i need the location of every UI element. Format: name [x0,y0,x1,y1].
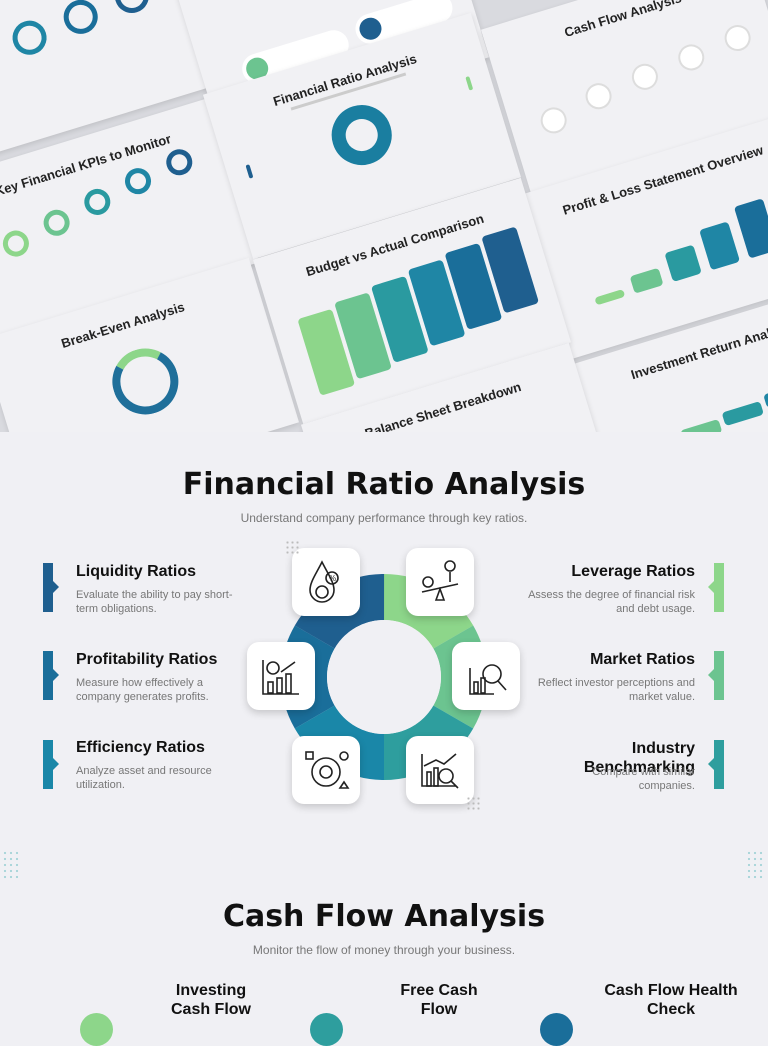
icon: profitability chart [247,642,315,710]
item: profitability ratios: Measure how effectively a company generates profits. [76,677,209,703]
circle markers [80,1013,113,1046]
slide: budget vs actual [253,178,571,424]
heading: health check: Check [647,1001,695,1018]
item: efficiency ratios: Analyze asset and resource utilization. [76,765,212,791]
item: profitability ratios: Profitability Ratios [76,651,217,668]
heading: free cash flow [400,982,478,1018]
slide: break-even: Break-Even Analysis [59,299,186,351]
title: Financial Ratio Analysis [183,467,585,502]
slide: budget vs actual: Budget vs Actual Comparison [304,211,486,279]
icon: efficiency cycle [292,736,360,804]
bar: profitability [43,651,53,700]
heading: free cash flow: Flow [421,1001,457,1018]
item: liquidity ratios: Evaluate the ability to pay short-term obligations. [76,589,233,615]
heading: investing cash flow: Investing [176,982,246,999]
item: leverage ratios: Assess the degree of financial risk and debt usage. [528,589,695,615]
title: cash flow analysis: Cash Flow Analysis [223,899,545,934]
slide: financial ratio analysis [203,13,521,259]
subtitle: cash flow: Monitor the flow of money through your business. [253,943,515,957]
icon: liquidity drop [292,548,360,616]
slide: balance sheet [301,343,619,589]
icon: leverage scale [406,548,474,616]
slide: financial ratio analysis: Financial Ratio Analysis [271,51,418,109]
slide: profit & loss: Profit & Loss Statement Overview [561,142,765,218]
item: industry benchmarking: Benchmarking [584,759,695,776]
slide: break-even [0,258,299,504]
heading: health check: Cash Flow Health [604,982,738,999]
icon: liquidity drop: % [329,574,336,583]
slide: costs for decision [0,0,229,163]
item: efficiency ratios: Efficiency Ratios [76,739,205,756]
item: leverage ratios [528,563,695,615]
item: industry benchmarking [584,740,695,792]
slide: key financial KPIs [0,98,259,344]
bar: efficiency [43,740,53,789]
item: market ratios: Market Ratios [590,651,695,668]
icon: market magnifier [452,642,520,710]
heading: investing cash flow [171,982,251,1018]
heading: health check [604,982,738,1018]
donut chart [286,574,482,780]
slide: cash flow [481,0,768,194]
item: industry benchmarking: Compare with similar [592,766,695,778]
item: industry benchmarking: companies. [639,780,695,792]
item: profitability ratios [76,651,217,703]
item: market ratios: Reflect investor perceptions and market value. [538,677,695,703]
item: leverage ratios: Leverage Ratios [571,563,695,580]
bar: liquidity [43,563,53,612]
slide: investment return [571,283,768,529]
slide: profit & loss [521,113,768,359]
item: liquidity ratios: Liquidity Ratios [76,563,196,580]
decorative dots [285,540,301,556]
slide: expense [171,0,489,139]
bar: leverage [714,563,724,612]
bar: market [714,651,724,700]
subtitle: Understand company performance through key ratios. [241,511,527,525]
item: industry benchmarking: Industry [632,740,695,757]
item: efficiency ratios [76,739,212,791]
collage of slide previews [0,0,768,432]
heading: investing cash flow: Cash Flow [171,1001,251,1018]
item: market ratios [538,651,695,703]
icon: benchmarking chart [406,736,474,804]
bar: industry [714,740,724,789]
item: liquidity ratios [76,563,233,615]
heading: free cash flow: Free Cash [400,982,478,999]
